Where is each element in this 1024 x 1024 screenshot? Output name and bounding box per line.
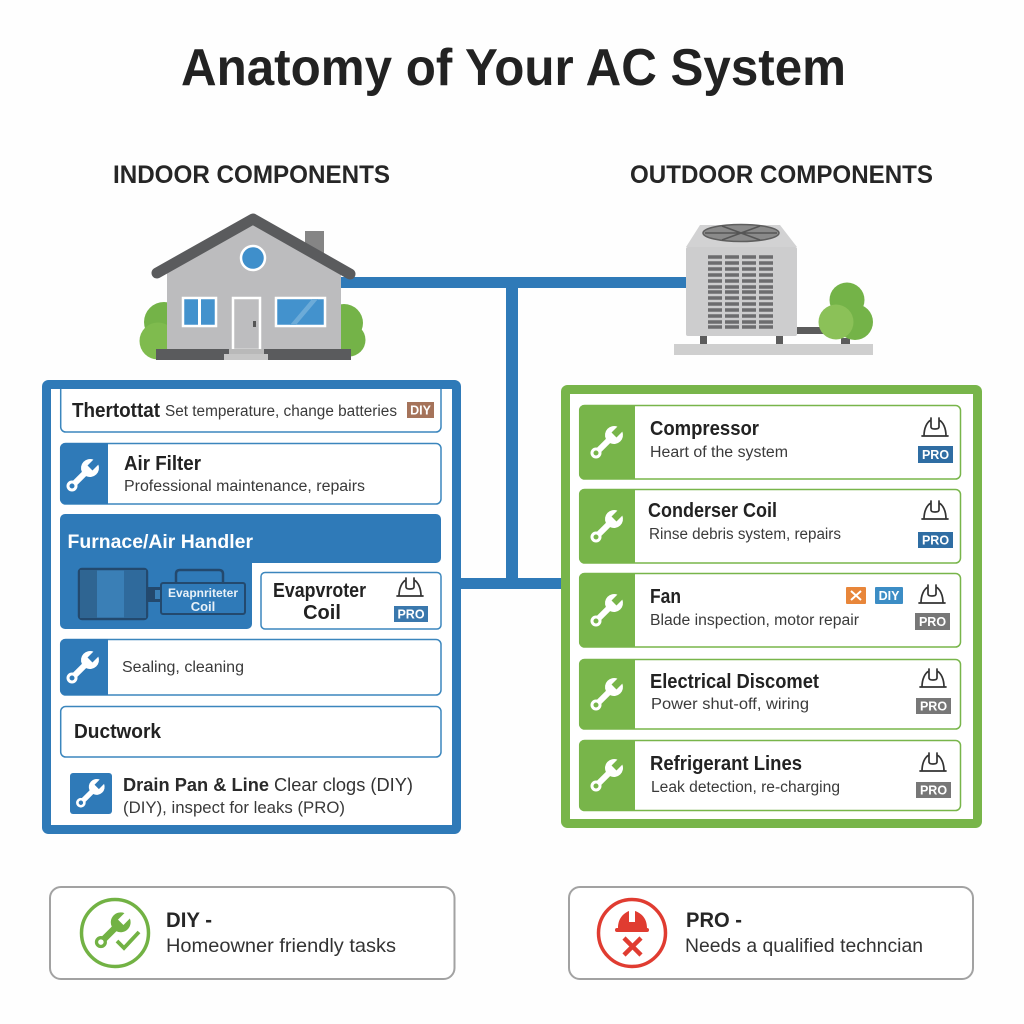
icon: wrench and check — [82, 900, 148, 966]
row: compressor — [579, 405, 960, 479]
row: thermostat: DIY — [410, 404, 432, 418]
icon: house — [140, 219, 366, 360]
icon: outdoor AC unit — [674, 224, 873, 355]
row: fan: Fan — [650, 586, 681, 608]
row: thermostat: Set temperature, change batteries — [165, 403, 397, 420]
row: evaporator coil: PRO — [397, 608, 425, 622]
row: condenser coil: Rinse debris system, repairs — [649, 526, 841, 543]
row: air filter: Professional maintenance, repairs — [124, 478, 365, 495]
row: thermostat: Thertottat — [72, 400, 160, 422]
row: sealing, cleaning: Sealing, cleaning — [122, 659, 244, 676]
row: fan: PRO — [919, 615, 946, 629]
row: evaporator coil: Coil — [303, 602, 341, 624]
row: drain pan and line: (DIY), inspect for leaks (PRO) — [123, 798, 345, 817]
row: fan — [579, 573, 960, 647]
row: ductwork — [61, 706, 441, 757]
row: drain pan and line — [70, 773, 413, 817]
legend: PRO: PRO - — [686, 909, 742, 932]
row: electrical disconnect: Power shut-off, wiring — [651, 696, 809, 713]
furnace diagram — [79, 569, 245, 619]
title: Anatomy of Your AC System — [181, 39, 846, 97]
row: compressor: PRO — [922, 448, 949, 462]
row: condenser coil: PRO — [922, 534, 949, 548]
row: fan: Blade inspection, motor repair — [650, 612, 859, 629]
row: electrical disconnect: Electrical Discomet — [650, 671, 819, 693]
legend: DIY: Homeowner friendly tasks — [166, 935, 396, 957]
icon: red hard hat with X — [598, 900, 666, 966]
row: sealing, cleaning — [60, 639, 441, 695]
row: refrigerant lines — [579, 740, 960, 811]
row: furnace / air handler — [60, 514, 441, 629]
heading: outdoor components: OUTDOOR COMPONENTS — [630, 161, 933, 189]
furnace diagram: Evapnriteter — [168, 586, 238, 600]
panel: outdoor components — [566, 390, 978, 824]
row: ductwork: Ductwork — [74, 721, 162, 743]
row: condenser coil: Conderser Coil — [648, 500, 777, 522]
row: refrigerant lines: Refrigerant Lines — [650, 753, 802, 775]
row: compressor: Compressor — [650, 418, 759, 440]
row: air filter: Air Filter — [124, 453, 201, 475]
row: evaporator coil: Evapvroter — [273, 580, 366, 602]
legend: DIY — [50, 887, 454, 979]
heading: indoor components: INDOOR COMPONENTS — [113, 161, 390, 189]
row: condenser coil — [579, 489, 960, 563]
row: drain pan and line: Clear clogs (DIY) — [274, 775, 413, 795]
furnace diagram: Coil — [191, 599, 215, 614]
panel: indoor components — [46, 384, 456, 830]
row: refrigerant lines: Leak detection, re-charging — [651, 779, 840, 796]
row: electrical disconnect — [579, 659, 960, 729]
row: fan: DIY — [879, 589, 900, 603]
row: furnace / air handler: Furnace/Air Handler — [68, 531, 253, 553]
row: refrigerant lines: PRO — [920, 784, 947, 798]
connecting pipes — [335, 277, 687, 589]
row: air filter — [60, 443, 441, 504]
legend: DIY: DIY - — [166, 909, 212, 932]
legend: PRO — [569, 887, 973, 979]
row: evaporator coil — [261, 572, 441, 629]
legend: PRO: Needs a qualified techncian — [685, 935, 923, 957]
row: thermostat — [61, 389, 441, 432]
row: drain pan and line: Drain Pan & Line — [123, 775, 269, 795]
row: compressor: Heart of the system — [650, 444, 788, 461]
row: electrical disconnect: PRO — [920, 700, 947, 714]
